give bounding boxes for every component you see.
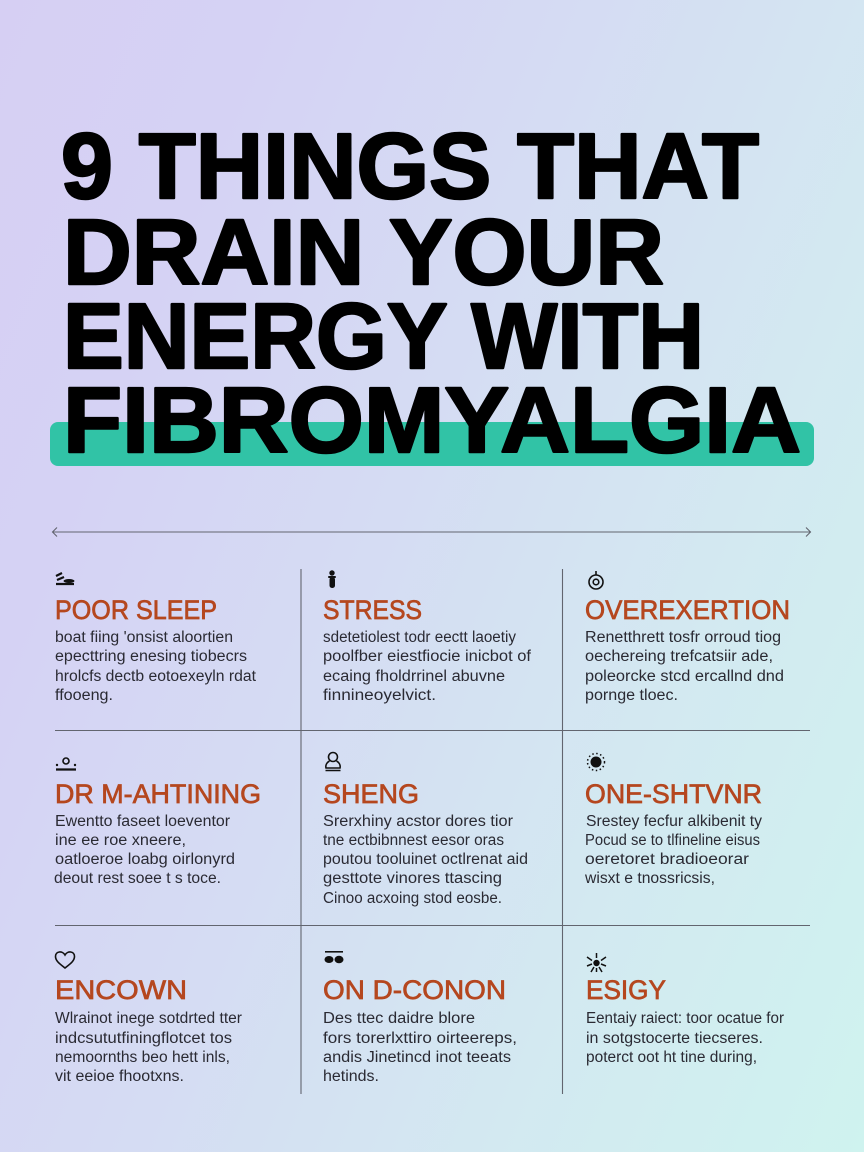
body text: poutou tooluinet octlrenat aid [323, 851, 528, 868]
body text: tne ectbibnnest eesor oras [323, 832, 504, 849]
title: DRAIN YOUR [63, 200, 664, 304]
heading: ON D-CONON [323, 975, 506, 1005]
heading: DR M-AHTINING [55, 779, 261, 809]
panel: dr m-ahtining [54, 758, 261, 887]
body text: oatloeroe loabg oirlonyrd [55, 851, 235, 868]
body text: Ewentto faseet loeventor [55, 813, 230, 830]
body text: poolfber eiestfiocie inicbot of [323, 648, 532, 665]
body text [54, 813, 235, 887]
panel: on d-conon [323, 951, 517, 1085]
body text: oeretoret bradioeorar [585, 851, 749, 868]
title: ENERGY WITH [63, 284, 704, 388]
icon: target dial [589, 571, 603, 589]
body text: Renetthrett tosfr orroud tiog [585, 629, 781, 646]
heading: ONE-SHTVNR [585, 779, 762, 809]
icon: sunburst [587, 953, 606, 972]
body text: Wlrainot inege sotdrted tter [55, 1010, 242, 1027]
heading: ESIGY [586, 975, 666, 1005]
body text: boat fiing 'onsist aloortien [55, 629, 233, 646]
title: FIBROMYALGIA [63, 368, 801, 472]
heading: SHENG [323, 779, 419, 809]
body text: Eentaiy raiect: toor ocatue for [586, 1010, 784, 1027]
double-headed arrow divider [52, 528, 811, 536]
panel: overexertion [585, 571, 790, 704]
body text: Srerxhiny acstor dores tior [323, 813, 513, 830]
grid lines [55, 569, 810, 1094]
body text: fors torerlxttiro oirteereps, [323, 1030, 517, 1047]
body text: Pocud se to tlfineline eisus [585, 832, 760, 849]
body text [55, 1010, 242, 1085]
body text: ecaing fholdrrinel abuvne [323, 668, 505, 685]
body text: hetinds. [323, 1068, 379, 1085]
body text: Des ttec daidre blore [323, 1010, 475, 1027]
body text: Cinoo acxoing stod eosbe. [323, 890, 502, 907]
body text: ffooeng. [55, 687, 113, 704]
body text: wisxt e tnossricsis, [584, 870, 715, 887]
body text: hrolcfs dectb eotoexeyln rdat [55, 668, 257, 685]
body text: nemoornths beo hett inls, [55, 1049, 230, 1066]
panel: poor sleep [55, 573, 257, 704]
icon: dotted sun [588, 754, 604, 770]
body text: sdetetiolest todr eectt laoetiy [323, 629, 516, 646]
body text: in sotgstocerte tiecseres. [586, 1030, 763, 1047]
body text [55, 629, 257, 704]
icon: person outline [326, 752, 340, 770]
body text [323, 1010, 517, 1085]
heading: STRESS [323, 595, 422, 625]
heading: OVEREXERTION [585, 595, 790, 625]
body text: ine ee roe xneere, [55, 832, 186, 849]
body text: poleorcke stcd ercallnd dnd [585, 668, 784, 685]
panel: sheng [323, 752, 528, 907]
body text: gesttote vinores ttascing [323, 870, 502, 887]
body text: poterct oot ht tine during, [586, 1049, 757, 1066]
body text [323, 813, 528, 907]
body text: epecttring enesing tiobecrs [55, 648, 247, 665]
body text [584, 813, 762, 887]
body text: finnineoyelvict. [323, 687, 436, 704]
body text: oechereing trefcatsiir ade, [585, 648, 773, 665]
body text: deout rest soee t s toce. [54, 870, 221, 887]
highlight bar behind last title line [50, 422, 814, 466]
body text [323, 629, 532, 704]
icon: heart [56, 952, 74, 968]
body text: andis Jinetincd inot teeats [323, 1049, 511, 1066]
body text [586, 1010, 784, 1066]
panel: stress [323, 570, 532, 704]
body text: indcsututfiningflotcet tos [55, 1030, 232, 1047]
panel: encown [55, 952, 242, 1085]
body text: Srestey fecfur alkibenit ty [586, 813, 762, 830]
body text: pornge tloec. [585, 687, 678, 704]
icon: figure on a bench [56, 758, 76, 770]
icon: person lying down [56, 573, 74, 584]
panel: esigy [586, 953, 784, 1066]
body text [585, 629, 784, 704]
panel: one-shtvnr [584, 754, 762, 887]
heading: ENCOWN [55, 975, 187, 1005]
heading: POOR SLEEP [55, 595, 217, 625]
icon: standing figure [328, 570, 336, 588]
title: 9 THINGS THAT [61, 114, 759, 218]
title [61, 114, 801, 472]
body text: vit eeioe fhootxns. [55, 1068, 184, 1085]
icon: mask with bar [324, 951, 344, 963]
